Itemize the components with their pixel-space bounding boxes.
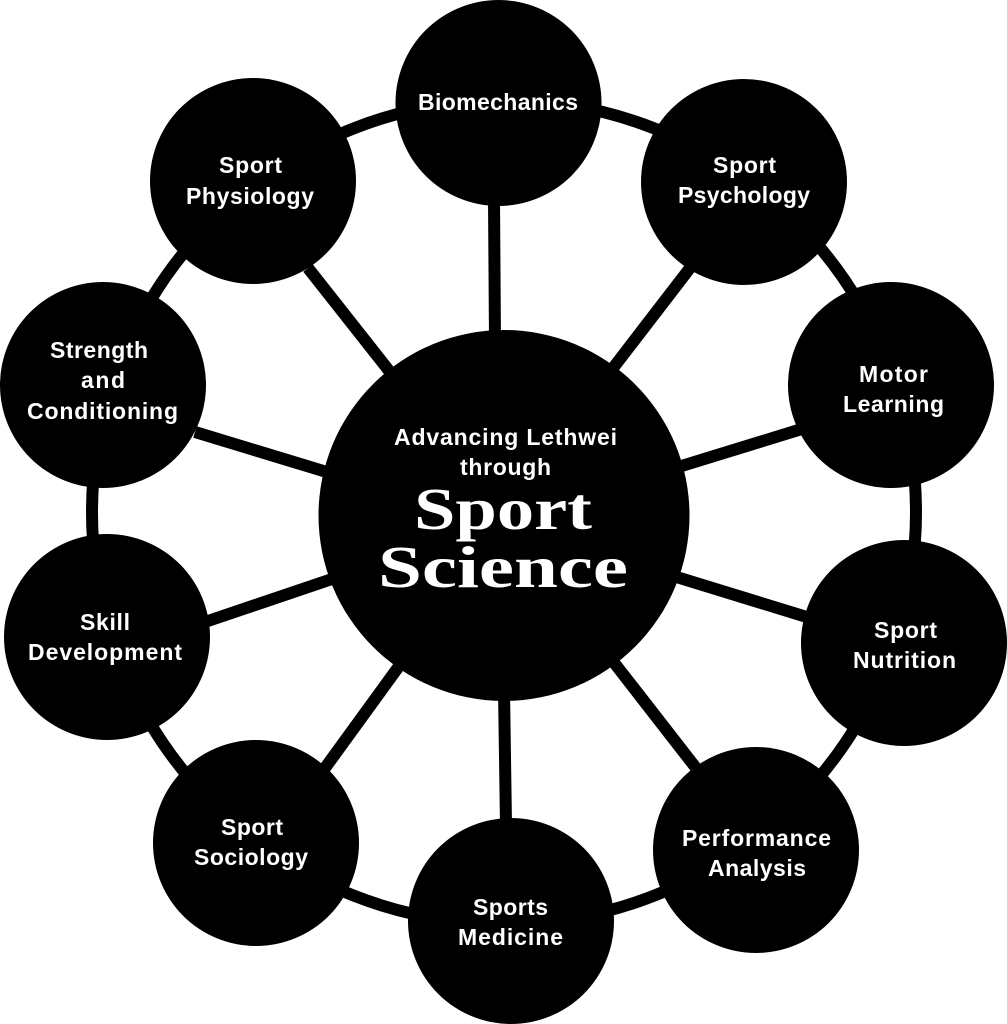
hub title: Sport (414, 476, 592, 542)
node: Sport Psychology: Sport (713, 152, 776, 178)
node: Performance Analysis: Performance (682, 825, 831, 851)
hub subtitle (394, 424, 617, 480)
node: Sport Physiology: Physiology (186, 183, 314, 209)
node: Motor Learning: Motor (859, 361, 928, 387)
node: Biomechanics (396, 0, 602, 206)
node: Skill Development: Development (28, 639, 182, 665)
outer ring (92, 100, 916, 924)
node: Strength and Conditioning: Strength (50, 337, 148, 363)
hub subtitle: Advancing Lethwei (394, 424, 617, 450)
node: Sports Medicine (408, 818, 614, 1024)
center hub (318, 330, 690, 701)
spokes (195, 200, 810, 825)
node: Sports Medicine: Sports (473, 894, 548, 920)
node: Skill Development (4, 534, 210, 740)
node: Sport Nutrition (801, 540, 1007, 746)
node: Motor Learning (788, 282, 994, 488)
hub subtitle: through (460, 454, 551, 480)
node: Sport Physiology (150, 78, 356, 284)
node: Strength and Conditioning: Conditioning (27, 398, 178, 424)
node: Biomechanics: Biomechanics (418, 89, 578, 115)
node: Strength and Conditioning (0, 282, 206, 488)
node: Performance Analysis (653, 747, 859, 953)
node: Performance Analysis: Analysis (708, 855, 806, 881)
node: Sport Psychology (641, 79, 847, 285)
node: Sport Nutrition: Sport (874, 617, 937, 643)
node: Motor Learning: Learning (843, 391, 944, 417)
node: Sport Sociology: Sociology (194, 844, 308, 870)
node: Skill Development: Skill (80, 609, 130, 635)
node: Sport Psychology: Psychology (678, 182, 810, 208)
node: Sport Sociology: Sport (221, 814, 283, 840)
node: Sports Medicine: Medicine (458, 924, 563, 950)
node: Sport Physiology: Sport (219, 152, 282, 178)
hub title: Science (378, 534, 628, 600)
node: Sport Nutrition: Nutrition (853, 647, 956, 673)
hub title (378, 476, 628, 600)
node: Sport Sociology (153, 740, 359, 946)
node: Strength and Conditioning: and (81, 367, 125, 393)
